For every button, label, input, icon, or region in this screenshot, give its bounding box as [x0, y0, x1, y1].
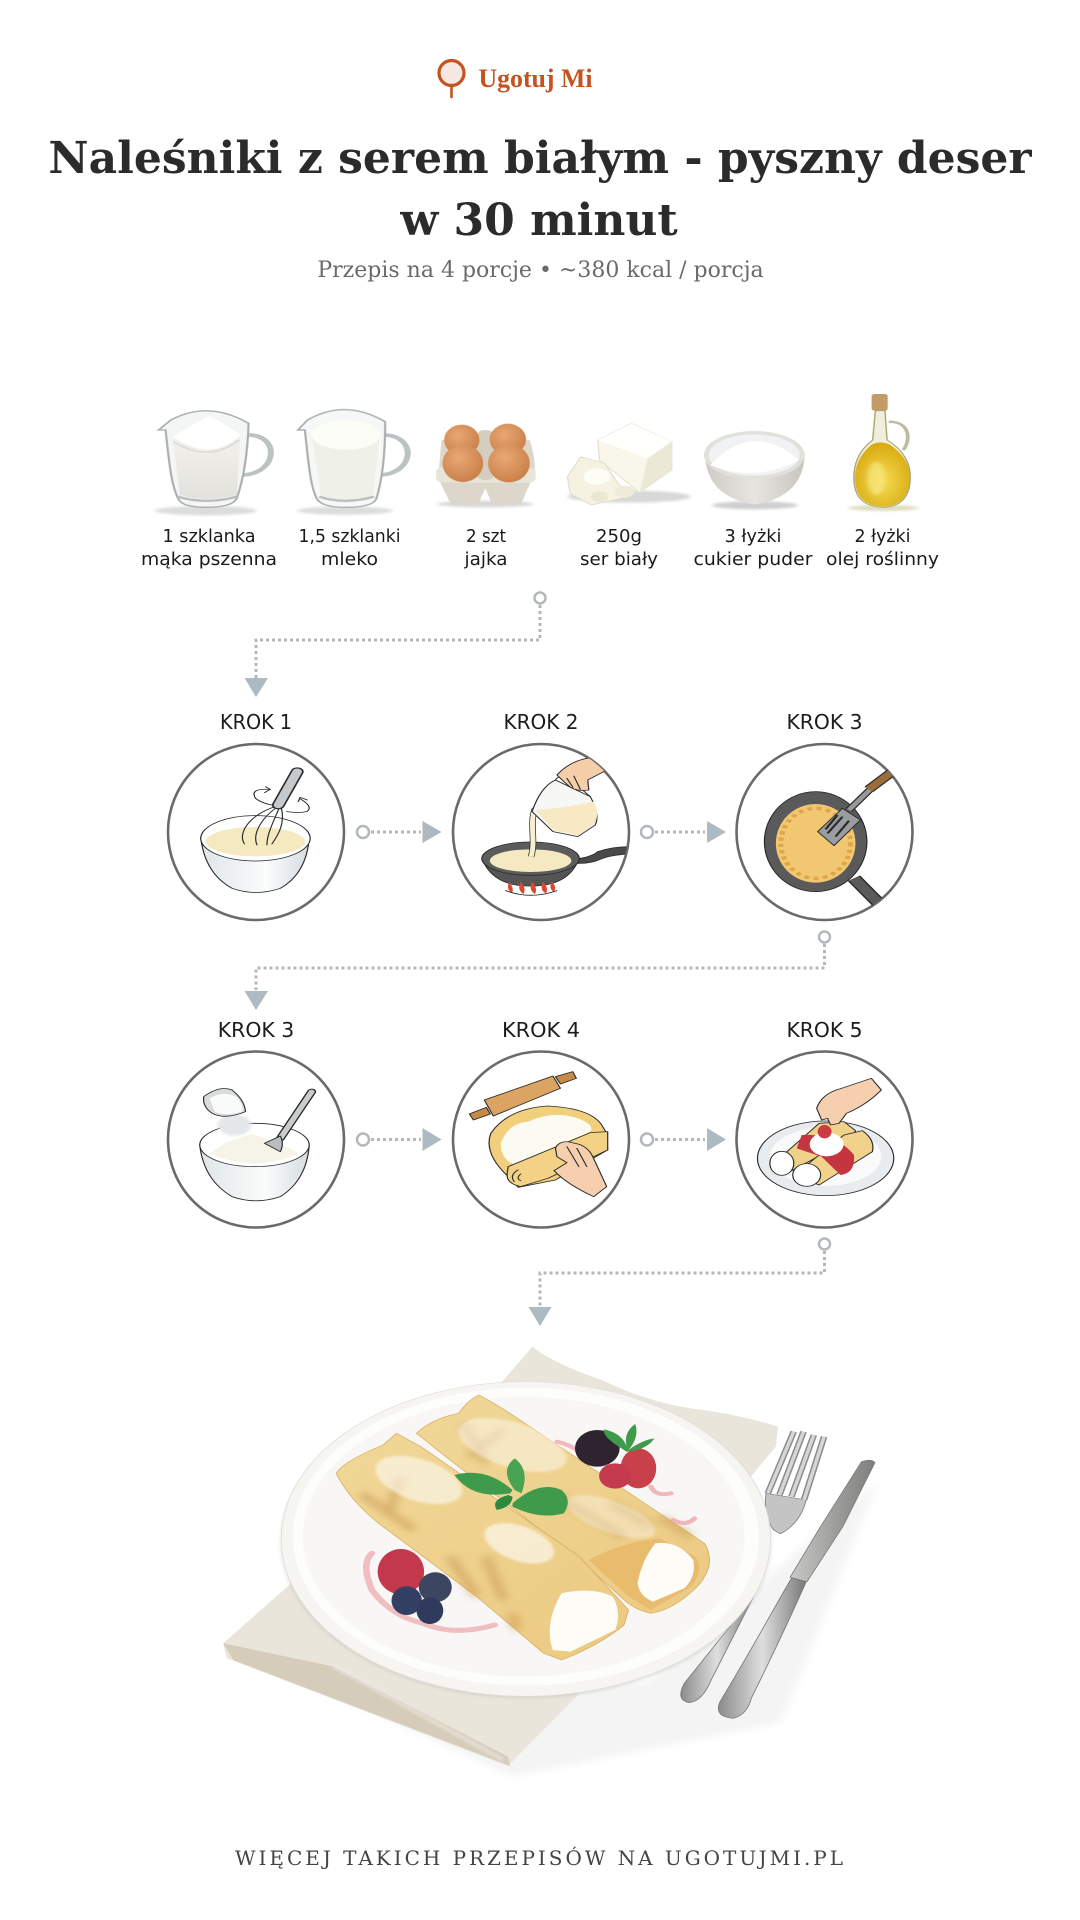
ingredient: cheese: [580, 526, 658, 570]
step 1: KROK 1: [220, 710, 292, 734]
ingredient: flour: mąka pszenna: [141, 549, 277, 570]
ingredient: milk: mleko: [321, 549, 378, 570]
icon: powdered sugar bowl: [704, 431, 805, 509]
footer: WIĘCEJ TAKICH PRZEPISÓW NA UGOTUJMI.PL: [235, 1845, 843, 1870]
ingredient: oil: [826, 526, 939, 570]
arrow: step 1 to 2: [357, 821, 442, 843]
panel: ingredients: [141, 394, 939, 570]
back crepe: [417, 1395, 709, 1613]
illustration: serving: [757, 1078, 894, 1196]
icon: eggs in carton: [436, 424, 536, 507]
plate: [280, 1382, 771, 1699]
icon: flour jug: [155, 411, 271, 515]
step 5: KROK 5: [786, 1018, 862, 1042]
napkin: [223, 1347, 778, 1766]
shadow: [267, 1480, 879, 1777]
ingredient: sugar: cukier puder: [694, 549, 813, 570]
arrow: step 4 to 5: [641, 1128, 726, 1151]
ingredient: milk: [298, 526, 400, 570]
icon: oil bottle: [848, 394, 919, 511]
step 4: [453, 1018, 629, 1228]
ingredient icons: [155, 394, 919, 515]
arrow: row 1 to row 2: [244, 932, 830, 1010]
ingredient: flour: [141, 526, 277, 570]
ingredient: oil: olej roślinny: [826, 549, 939, 570]
finished dish photo: [223, 1347, 879, 1777]
ingredient: cheese: 250g: [596, 526, 642, 547]
fork: [681, 1432, 824, 1703]
brand name: Ugotuj Mi: [478, 64, 592, 93]
step 3b: [168, 1018, 344, 1228]
ingredient: sugar: 3 łyżki: [724, 526, 782, 547]
illustration: whisking: [201, 772, 310, 892]
ingredient: eggs: [463, 526, 508, 570]
step 4: KROK 4: [502, 1018, 580, 1042]
ingredient: eggs: jajka: [463, 549, 508, 570]
arrow: step 2 to 3: [641, 821, 726, 843]
panel: steps row 1: [168, 710, 912, 920]
knife: [718, 1460, 875, 1718]
arrow: steps to finished dish: [528, 1238, 830, 1326]
illustration: frying pancake: [764, 771, 894, 903]
illustration: rolling the pancake: [469, 1072, 608, 1197]
subtitle: Przepis na 4 porcje • ~380 kcal / porcja: [317, 258, 764, 283]
ingredient: eggs: 2 szt: [466, 526, 506, 547]
berries bottom: [366, 1549, 495, 1630]
ingredient: cheese: ser biały: [580, 549, 658, 570]
arrow: step 3b to 4: [357, 1128, 442, 1151]
step 3b: KROK 3: [218, 1018, 294, 1042]
berries top: [557, 1424, 695, 1523]
icon: spoon: [439, 60, 464, 97]
title: Naleśniki z serem białym - pyszny deser: [48, 133, 1032, 184]
ingredient: milk: 1,5 szklanki: [298, 526, 400, 547]
illustration: pouring batter: [482, 757, 630, 895]
panel: steps row 2: [168, 1018, 912, 1228]
step 3: KROK 3: [786, 710, 862, 734]
icon: white cheese: [567, 423, 691, 505]
step 3: [736, 710, 912, 920]
mint garnish: [454, 1458, 568, 1516]
step 2: KROK 2: [504, 710, 578, 734]
logo: [439, 60, 592, 97]
step 5: [736, 1018, 912, 1228]
icon: milk jug: [297, 410, 408, 515]
ingredient: oil: 2 łyżki: [854, 526, 910, 547]
illustration: mixing cheese with sugar: [200, 1088, 312, 1201]
ingredient: sugar: [694, 526, 813, 570]
step 2: [453, 710, 630, 920]
ingredient: flour: 1 szklanka: [162, 526, 256, 547]
step 1: [168, 710, 344, 920]
front crepe: [336, 1433, 629, 1660]
title: w 30 minut: [399, 195, 678, 246]
arrow: ingredients to step 1: [244, 592, 546, 697]
